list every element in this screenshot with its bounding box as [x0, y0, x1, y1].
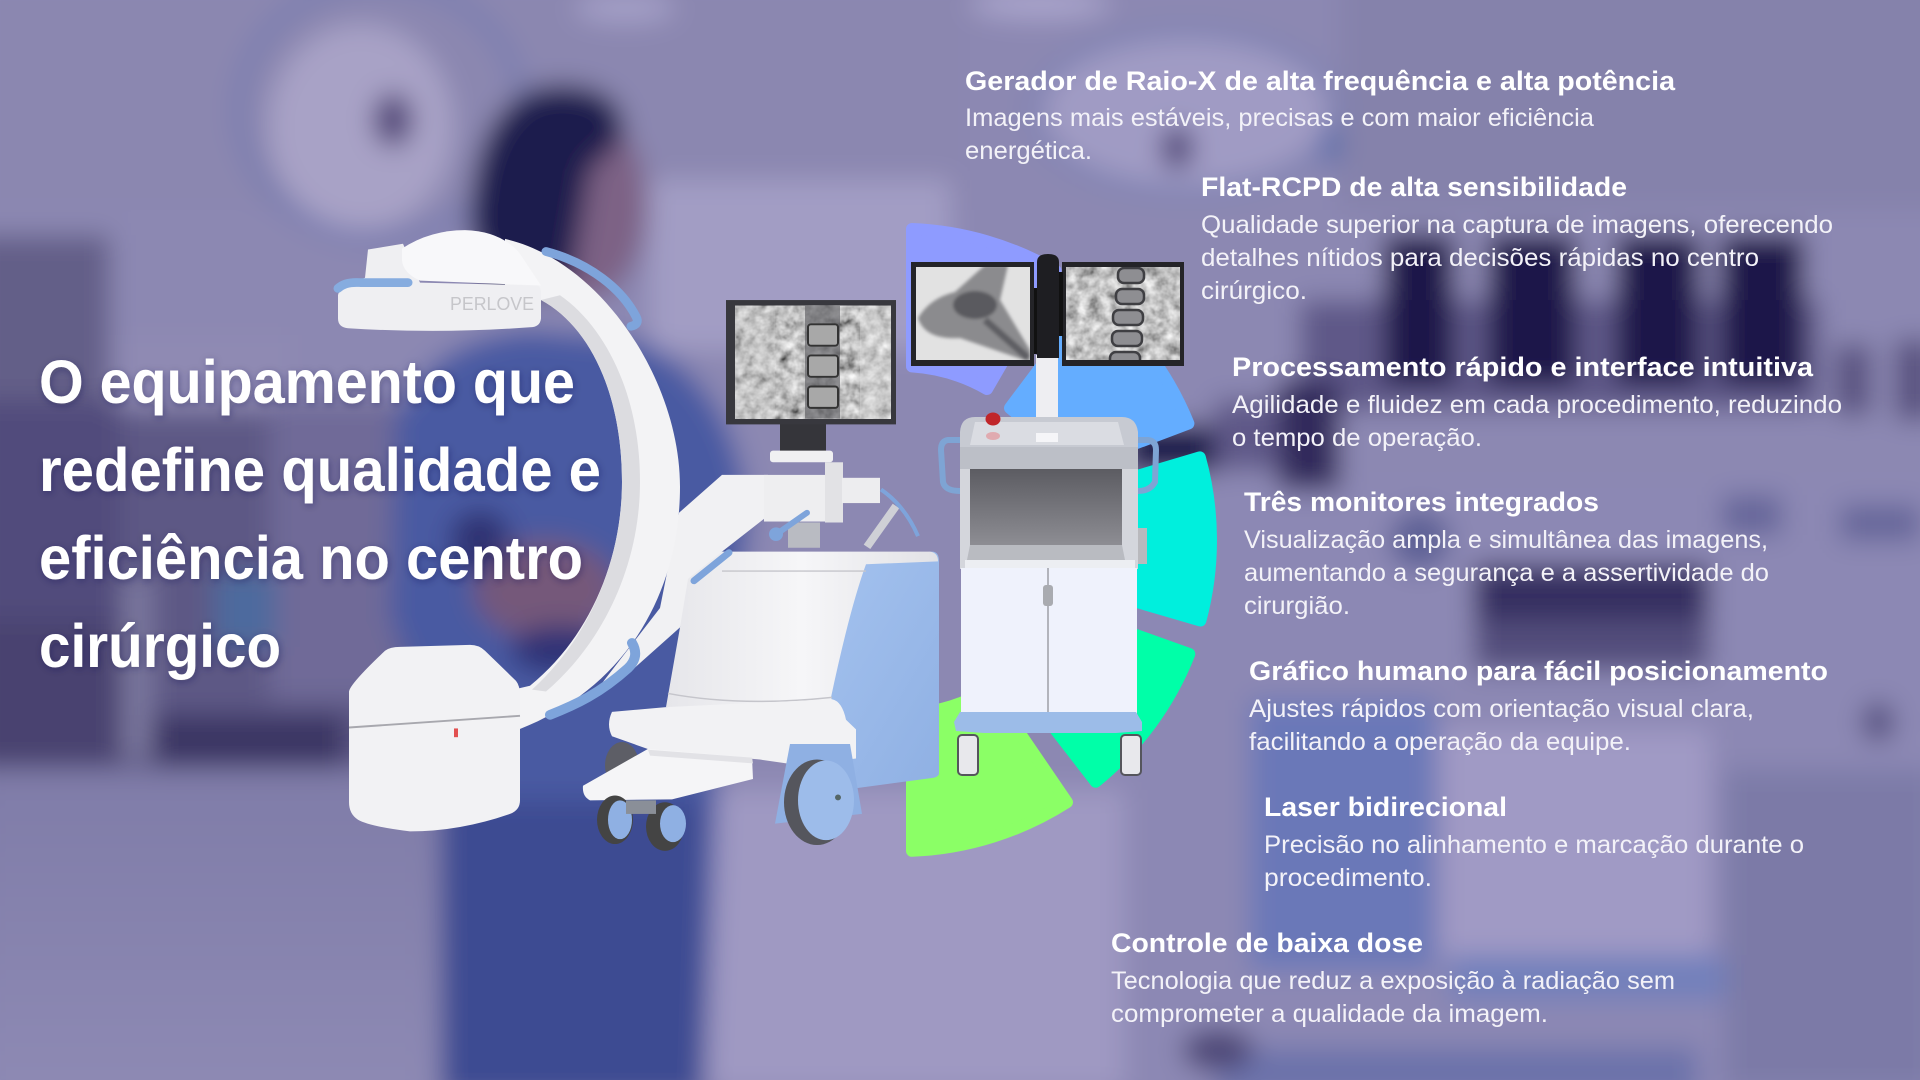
feature: laser: Laser bidirecional: [1264, 792, 1507, 822]
C arc: [505, 239, 680, 729]
feature: gráfico humano: facilitando a operação da equipe.: [1249, 728, 1631, 756]
generator head: PERLOVE: [450, 293, 534, 314]
cart with dual monitors: [911, 254, 1184, 775]
feature: baixa dose: Tecnologia que reduz a exposição à radiação sem: [1111, 967, 1675, 995]
arc handle top: [546, 251, 637, 326]
left x-ray monitor: [911, 262, 1034, 366]
feature: baixa dose: Controle de baixa dose: [1111, 928, 1423, 958]
black pole head: [1034, 254, 1063, 358]
cart niche: [960, 469, 1138, 569]
feature: gráfico humano: Ajustes rápidos com orientação visual clara,: [1249, 695, 1754, 723]
cart doors: [961, 568, 1137, 714]
segment: cyan: [1068, 457, 1211, 620]
side cup holder: [1135, 528, 1147, 564]
feature: laser: procedimento.: [1264, 864, 1432, 892]
cart pole: [1036, 355, 1058, 421]
lower right cabinet: [1250, 700, 1435, 970]
feature: flat-RCPD: Flat-RCPD de alta sensibilidade: [1201, 172, 1627, 202]
segment: periwinkle: [912, 229, 1056, 389]
column handle: [694, 553, 729, 581]
feature: gerador: Gerador de Raio-X de alta frequência e alta potência: [965, 66, 1676, 96]
small front wheels: [597, 795, 686, 851]
caster right: [1121, 735, 1141, 775]
cart handles: [941, 440, 1156, 491]
feature: processamento: [1232, 352, 1842, 452]
feature: monitores: cirurgião.: [1244, 592, 1350, 620]
segment: mint: [1012, 608, 1189, 782]
feature: baixa dose: comprometer a qualidade da imagem.: [1111, 1000, 1548, 1028]
right lamp: [1046, 40, 1326, 184]
left lamp: [239, 0, 521, 238]
main unit blue rear panel: [800, 552, 939, 789]
cart base: [954, 712, 1142, 733]
feature: gerador: [965, 66, 1676, 165]
generator head: [338, 230, 541, 331]
feature: monitores: [1244, 487, 1769, 620]
cart tray: [960, 412, 1138, 470]
head and hair: [523, 110, 647, 300]
rear small wheel: [605, 742, 639, 789]
caster left: [958, 735, 978, 775]
title: eficiência no centro: [39, 524, 583, 592]
right x-ray monitor: [1062, 262, 1184, 367]
C-arm X-ray machine: [338, 230, 939, 851]
feature: flat-RCPD: [1201, 172, 1833, 305]
monitor: [726, 300, 896, 462]
left room: [0, 235, 110, 400]
feature: flat-RCPD: Qualidade superior na captura de imagens, oferecendo: [1201, 211, 1833, 239]
title: cirúrgico: [39, 612, 281, 680]
feature: monitores: Três monitores integrados: [1244, 487, 1599, 517]
feature: gráfico humano: [1249, 656, 1828, 756]
feature: gerador: Imagens mais estáveis, precisas e com maior eficiência: [965, 104, 1594, 132]
feature: laser: [1264, 792, 1804, 892]
dark wall units right: [1300, 300, 1820, 410]
surgeon torso: [390, 330, 750, 1080]
feature: gerador: energética.: [965, 137, 1092, 165]
title: O equipamento que: [39, 348, 575, 416]
feature: baixa dose: [1111, 928, 1675, 1028]
center-bottom light wall: [704, 790, 1124, 1080]
feature: processamento: o tempo de operação.: [1232, 424, 1482, 452]
detector box: [349, 645, 520, 831]
title: [39, 348, 601, 680]
large wheel: [775, 744, 862, 845]
segment: blue: [1010, 297, 1188, 472]
dark window lower right: [1474, 565, 1709, 625]
monitor support arm: [764, 462, 918, 548]
feature: flat-RCPD: cirúrgico.: [1201, 277, 1307, 305]
feature: flat-RCPD: detalhes nítidos para decisões rápidas no centro: [1201, 244, 1759, 272]
right wall and lighter areas: [650, 180, 950, 350]
C-arm connector: [600, 475, 768, 686]
ceiling tone: [0, 0, 970, 210]
feature: gráfico humano: Gráfico humano para fácil posicionamento: [1249, 656, 1828, 686]
surgeon arm skin: [473, 540, 617, 640]
title: redefine qualidade e: [39, 436, 601, 504]
feature: monitores: Visualização ampla e simultânea das imagens,: [1244, 526, 1768, 554]
feature: monitores: aumentando a segurança e a assertividade do: [1244, 559, 1769, 587]
machine base: [609, 699, 856, 765]
foot plate: [583, 749, 753, 800]
feature: processamento: Agilidade e fluidez em cada procedimento, reduzindo: [1232, 391, 1842, 419]
radial segment chart: [912, 229, 1211, 851]
feature: processamento: Processamento rápido e interface intuitiva: [1232, 352, 1814, 382]
main column: [666, 552, 938, 710]
arc handle bottom: [550, 643, 635, 715]
segment: green: [912, 689, 1067, 851]
feature: laser: Precisão no alinhamento e marcação durante o: [1264, 831, 1804, 859]
